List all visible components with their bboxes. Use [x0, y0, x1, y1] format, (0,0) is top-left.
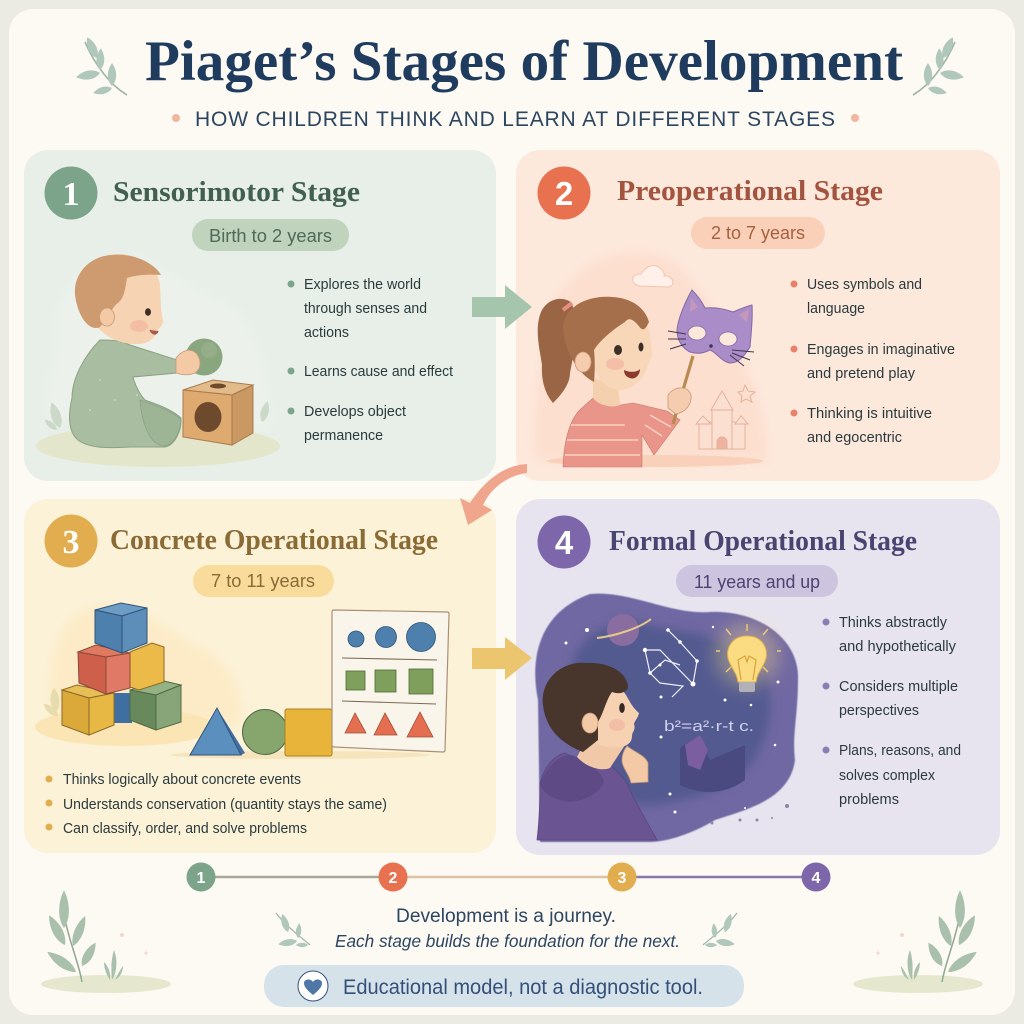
closing message: Each stage builds the foundation for the next. [335, 931, 680, 951]
blue block [95, 603, 147, 616]
stage 2 age pill: 2 to 7 years [711, 223, 805, 243]
stage 4 badge [538, 516, 590, 568]
ponytail [538, 299, 578, 403]
stage 4 bullet list: problems [839, 791, 899, 808]
stage 4 bullet list: perspectives [839, 702, 919, 719]
icon: right title sprig [913, 35, 965, 96]
stick [673, 356, 693, 424]
timeline node 2: 2 [389, 870, 398, 887]
subtitle: HOW CHILDREN THINK AND LEARN AT DIFFERENT STAGES [195, 108, 835, 131]
constellation [645, 630, 697, 697]
stage 1 bullet list: permanence [304, 427, 383, 444]
stage 3 bullet list [46, 771, 387, 837]
arrow: stage 1 to 2 [472, 285, 532, 329]
stage 3 bullet list: Thinks logically about concrete events [63, 771, 301, 788]
title: Piaget’s Stages of Development [145, 30, 903, 93]
girl body [563, 398, 680, 467]
stage 1 bullet list: Learns cause and effect [304, 363, 454, 380]
illustration: baby with ball and shape box [36, 254, 280, 467]
stage 3 age pill [193, 565, 334, 597]
stage 1 bullet list [288, 276, 454, 444]
stage 2 bullet list: Uses symbols and [807, 276, 922, 293]
cosmos cloud [535, 594, 798, 842]
illustration: thinking child and cosmos [535, 594, 798, 842]
decoration: left plant [41, 890, 171, 993]
stage 1 badge [44, 166, 98, 220]
timeline node 4 [802, 862, 830, 892]
panel: sensorimotor stage [24, 150, 496, 481]
timeline node 2 [378, 862, 408, 892]
stage 4 badge: 4 [555, 524, 574, 561]
yellow back block [130, 643, 164, 690]
icon: small left sprig [276, 913, 310, 948]
stage 3 bullet list: Can classify, order, and solve problems [63, 820, 307, 837]
illustration: loose shapes [170, 708, 430, 759]
stage 4 age pill [676, 565, 838, 597]
stage 4 bullet list: and hypothetically [839, 638, 956, 655]
stage 2 bullet list: language [807, 300, 865, 317]
icon: heart [298, 971, 328, 1001]
stage 2 bullet list [790, 276, 955, 446]
stage 2 heading: Preoperational Stage [617, 176, 883, 207]
equation: b²=a²·r-t c. [664, 718, 754, 735]
dust specks [710, 804, 789, 824]
boy head [582, 686, 639, 747]
stage 2 badge: 2 [555, 175, 573, 212]
stage 1 bullet list: actions [304, 324, 349, 341]
stage 4 bullet list [822, 614, 961, 808]
ball [186, 338, 222, 376]
stage 2 bullet list: Engages in imaginative [807, 341, 955, 358]
closing message: Development is a journey. [396, 906, 616, 927]
disclaimer pill [264, 965, 744, 1007]
girl head [590, 316, 652, 390]
cloud [633, 266, 673, 287]
abstract figure [680, 742, 745, 792]
green block [130, 681, 181, 695]
stage 1 bullet list: through senses and [304, 300, 427, 317]
hand [668, 388, 691, 414]
stage 4 bullet list: Plans, reasons, and [839, 742, 961, 759]
arrow: stage 2 to 3 [460, 464, 527, 525]
illustration: girl with cat mask [534, 252, 768, 467]
stage 1 age pill: Birth to 2 years [209, 226, 332, 246]
stage 3 bullet list: Understands conservation (quantity stays the same) [63, 796, 387, 813]
stage 3 age pill: 7 to 11 years [211, 571, 315, 591]
timeline [186, 862, 830, 892]
timeline node 4: 4 [812, 870, 821, 887]
illustration: classification board [332, 610, 449, 752]
neck [577, 738, 625, 769]
timeline node 1 [186, 862, 216, 892]
red block [78, 645, 130, 657]
timeline node 3: 3 [618, 870, 627, 887]
arrow: stage 3 to 4 [472, 637, 532, 680]
baby head [78, 254, 163, 344]
closing message [335, 906, 680, 951]
timeline node 1: 1 [197, 870, 206, 887]
stage 2 bullet list: Thinking is intuitive [807, 405, 932, 422]
stage 2 bullet list: and egocentric [807, 429, 902, 446]
boy hand at chin [622, 746, 648, 783]
yellow block [62, 685, 114, 698]
stage 1 bullet list: Develops object [304, 403, 407, 420]
illustration: stacked blocks [35, 603, 241, 746]
stage 4 bullet list: solves complex [839, 767, 935, 784]
planet [597, 614, 651, 646]
stage 3 badge: 3 [62, 524, 80, 561]
castle [696, 385, 755, 449]
boy hoodie [537, 753, 657, 840]
stage 2 badge [538, 166, 590, 220]
stage 1 heading: Sensorimotor Stage [113, 177, 360, 208]
shape box [183, 380, 253, 395]
baby hand [176, 350, 200, 375]
stage 4 age pill: 11 years and up [694, 572, 820, 592]
stage 1 bullet list: Explores the world [304, 276, 421, 293]
stage 1 badge: 1 [62, 176, 80, 213]
panel: preoperational stage [516, 150, 1000, 481]
decoration: right plant [853, 890, 983, 993]
baby body [70, 340, 181, 448]
stage 1 age pill [192, 219, 349, 251]
icon: small right sprig [703, 913, 737, 948]
cat mask [677, 290, 752, 363]
timeline node 3 [608, 862, 636, 892]
light bulb [715, 623, 781, 692]
icon: left title sprig [75, 35, 127, 96]
stage 2 bullet list: and pretend play [807, 365, 915, 382]
stage 3 badge [44, 514, 98, 568]
stage 3 heading: Concrete Operational Stage [110, 525, 438, 556]
panel: formal operational stage [516, 499, 1000, 855]
neck [593, 378, 620, 407]
stage 2 age pill [691, 217, 825, 249]
disclaimer pill: Educational model, not a diagnostic tool. [343, 976, 703, 999]
stage 4 bullet list: Considers multiple [839, 678, 958, 695]
stage 4 bullet list: Thinks abstractly [839, 614, 947, 631]
panel: concrete operational stage [24, 499, 496, 853]
stage 4 heading: Formal Operational Stage [609, 526, 917, 557]
